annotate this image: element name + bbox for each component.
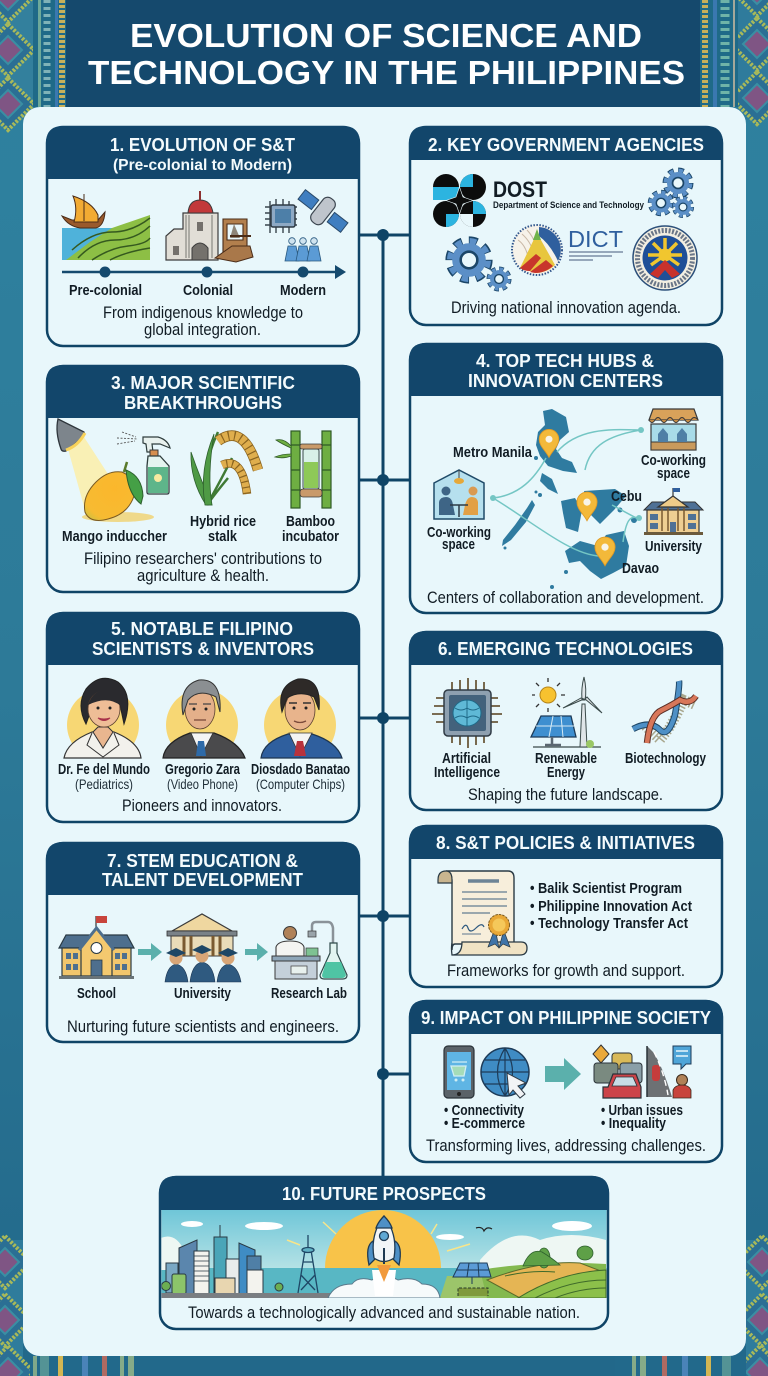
DOST wordmark: Department of Science and Technology (493, 200, 645, 211)
caption: Frameworks for growth and support. (447, 962, 685, 980)
labels: co-working left: Co-working (427, 524, 491, 541)
DICT wordmark: DICT (568, 226, 623, 252)
arrow: school to university (138, 943, 162, 961)
icon: colonial church and printing press (166, 191, 253, 262)
title banner (66, 0, 700, 108)
impact lists: • Inequality (601, 1115, 667, 1132)
technology labels: Renewable (535, 750, 597, 767)
woven border pattern: top left (0, 0, 66, 130)
panel 8: policies (409, 825, 723, 987)
caption: Towards a technologically advanced and sustainable nation. (188, 1304, 580, 1322)
woven border pattern: bottom right (615, 1236, 768, 1376)
map labels: University (645, 538, 703, 555)
heading: 10. FUTURE PROSPECTS (282, 1183, 486, 1204)
heading: 9. IMPACT ON PHILIPPINE SOCIETY (421, 1007, 712, 1028)
heading: 6. EMERGING TECHNOLOGIES (438, 638, 693, 659)
technology labels: Energy (547, 764, 585, 781)
policy list: • Balik Scientist Program (530, 880, 682, 897)
heading (409, 825, 723, 859)
heading: TALENT DEVELOPMENT (102, 869, 304, 890)
icon: traffic jam (593, 1045, 642, 1098)
launch clouds (328, 1276, 440, 1298)
heading: 7. STEM EDUCATION & (107, 850, 298, 871)
arrow timeline (62, 265, 346, 279)
labels: co-working right (641, 452, 706, 482)
heading: SCIENTISTS & INVENTORS (92, 638, 314, 659)
map labels (453, 444, 703, 577)
heading: (Pre-colonial to Modern) (113, 157, 292, 174)
era labels: Modern (280, 282, 326, 299)
scientist names (58, 761, 350, 792)
central timeline with connectors (359, 230, 410, 1178)
scientist names: Gregorio Zara (165, 761, 240, 778)
caption: Nurturing future scientists and engineers. (67, 1018, 339, 1036)
heading (409, 343, 723, 396)
arrow: benefits to challenges (545, 1058, 581, 1090)
portrait: Dr. Fe del Mundo (64, 678, 144, 763)
title: TECHNOLOGY IN THE PHILIPPINES (88, 54, 685, 91)
icon: co-working house (434, 470, 484, 519)
era labels: Pre-colonial (69, 282, 142, 299)
title (88, 17, 685, 91)
icon: government seal (633, 226, 697, 290)
heading: BREAKTHROUGHS (124, 392, 282, 413)
scientist names: (Video Phone) (167, 776, 238, 792)
scientist names: Diosdado Banatao (251, 761, 350, 778)
icon: bamboo incubator (275, 431, 331, 508)
labels: co-working right: Co-working (641, 452, 706, 469)
icon: spray bottle (117, 432, 170, 494)
communications tower (298, 1235, 318, 1293)
heading (409, 126, 723, 160)
heading: 5. NOTABLE FILIPINO (111, 618, 293, 639)
caption (84, 550, 322, 585)
heading (46, 126, 360, 179)
portrait: Diosdado Banatao (260, 679, 344, 763)
heading (46, 365, 360, 418)
breakthrough labels: incubator (282, 528, 339, 545)
era labels: Colonial (183, 282, 233, 299)
caption: Filipino researchers' contributions to (84, 550, 322, 568)
technology labels (434, 750, 707, 781)
woven border pattern: bottom left (0, 1236, 160, 1376)
icon: mango (82, 462, 154, 522)
icon: phone with cart (444, 1046, 474, 1098)
caption: From indigenous knowledge to (103, 304, 303, 322)
panel 5: notable scientists (46, 612, 360, 822)
illustration: future landscape (162, 1210, 606, 1298)
scientist names: Dr. Fe del Mundo (58, 761, 150, 778)
labels: co-working right: space (657, 465, 690, 482)
skyline (162, 1225, 283, 1294)
heading: INNOVATION CENTERS (468, 370, 663, 391)
breakthrough labels: Bamboo (286, 513, 335, 530)
rocket (368, 1216, 400, 1265)
stage labels: School (77, 985, 116, 1002)
policy list: • Philippine Innovation Act (530, 898, 692, 915)
icon: lamp and light beam (57, 419, 128, 514)
era labels (69, 282, 326, 299)
icon: university with graduates (165, 914, 241, 982)
technology labels: Artificial (442, 750, 491, 767)
map pins (539, 429, 615, 566)
impact lists: • Urban issues (601, 1102, 683, 1119)
heading: 3. MAJOR SCIENTIFIC (111, 372, 295, 393)
icon: university (644, 488, 703, 535)
panel 2: key government agencies (409, 126, 723, 325)
caption: Shaping the future landscape. (468, 786, 663, 804)
heading (159, 1176, 609, 1210)
panel 6: emerging technologies (409, 631, 723, 810)
heading (409, 1000, 723, 1034)
caption: agriculture & health. (137, 567, 269, 585)
impact lists: • E-commerce (444, 1115, 525, 1132)
network lines (493, 430, 641, 556)
heading: 8. S&T POLICIES & INITIATIVES (436, 832, 695, 853)
stage labels: University (174, 985, 232, 1002)
policy list (530, 880, 692, 932)
scientist names: (Pediatrics) (75, 776, 133, 792)
network nodes (490, 427, 644, 521)
caption: global integration. (144, 321, 261, 339)
icon: chip, satellite and people (265, 183, 354, 261)
icon: school (59, 916, 134, 979)
caption: Pioneers and innovators. (122, 797, 282, 815)
heading: 2. KEY GOVERNMENT AGENCIES (428, 134, 704, 155)
heading: 1. EVOLUTION OF S&T (110, 134, 296, 155)
woven border pattern: top right (700, 0, 768, 124)
labels: co-working left (427, 524, 491, 553)
icon: DOST logo (433, 174, 486, 227)
policy list: • Technology Transfer Act (530, 915, 688, 932)
caption: Driving national innovation agenda. (451, 299, 681, 317)
panel 10: future prospects (159, 1176, 609, 1329)
labels: co-working left: space (442, 536, 475, 553)
icon: road, commuter and sign (647, 1046, 691, 1098)
portrait: Gregorio Zara (162, 680, 246, 763)
icon: globe with cursor (481, 1048, 529, 1098)
caption: Centers of collaboration and development. (427, 589, 704, 607)
map labels: Cebu (611, 488, 642, 505)
hills and farm (440, 1276, 487, 1298)
icon: boat and rice terraces (62, 194, 150, 260)
icon: DNA helix (633, 681, 696, 743)
technology labels: Intelligence (434, 764, 500, 781)
panel 1: evolution of S&T (46, 126, 360, 346)
breakthrough labels (62, 513, 339, 545)
icon: DICT seal (512, 225, 562, 275)
DOST wordmark (493, 177, 645, 211)
icon: scroll with seal (438, 871, 527, 955)
icon: hybrid rice stalk (191, 432, 258, 505)
icon: gears left (451, 242, 509, 289)
breakthrough labels: Mango induccher (62, 528, 167, 545)
map labels: Davao (622, 560, 659, 577)
icon: research lab (272, 922, 347, 979)
stage labels: Research Lab (271, 985, 347, 1002)
icon: solar panel and wind turbine (531, 677, 602, 748)
caption (103, 304, 303, 339)
heading (409, 631, 723, 665)
map of the Philippines (502, 409, 637, 589)
icon: AI chip (432, 678, 502, 748)
impact lists (444, 1102, 683, 1132)
breakthrough labels: Hybrid rice (190, 513, 256, 530)
title: EVOLUTION OF SCIENCE AND (130, 17, 642, 54)
map labels: Metro Manila (453, 444, 533, 461)
panel 9: societal impact (409, 1000, 723, 1162)
heading: 4. TOP TECH HUBS & (476, 350, 654, 371)
icon: gears right (651, 171, 692, 216)
DOST wordmark: DOST (493, 177, 547, 202)
arrow: university to research lab (245, 943, 268, 961)
panel 3: scientific breakthroughs (46, 365, 360, 592)
caption: Transforming lives, addressing challenges. (426, 1137, 706, 1155)
breakthrough labels: stalk (208, 528, 238, 545)
panel 7: STEM education (46, 842, 360, 1042)
solar array (453, 1263, 491, 1284)
impact lists: • Connectivity (444, 1102, 525, 1119)
icon: co-working storefront (649, 409, 698, 450)
heading (46, 842, 360, 895)
heading (46, 612, 360, 665)
scientist names: (Computer Chips) (256, 776, 345, 792)
stage labels (77, 985, 347, 1002)
panel 4: tech hubs (409, 343, 723, 613)
technology labels: Biotechnology (625, 750, 707, 767)
